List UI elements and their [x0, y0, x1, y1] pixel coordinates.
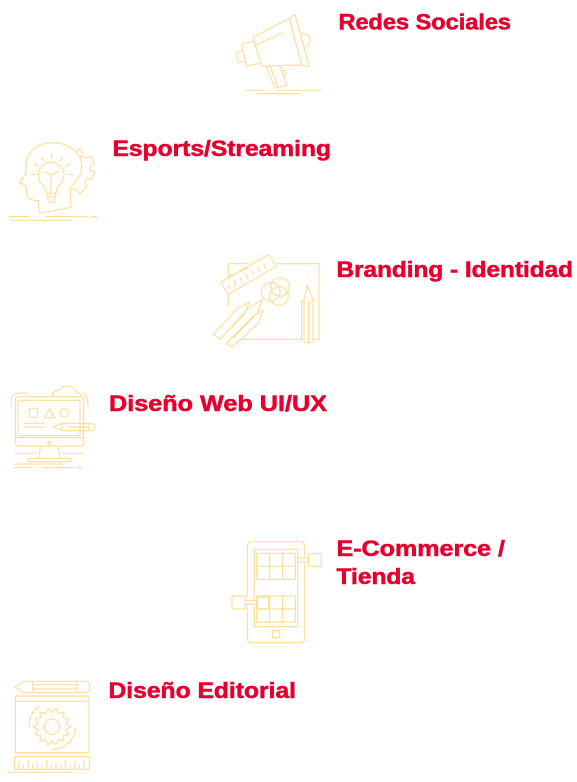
icon: computer monitor with pencil — [11, 386, 95, 468]
icon: smartphone with e-commerce grid — [232, 542, 321, 643]
heading: Branding - Identidad: Branding - Identidad — [336, 257, 573, 282]
heading: Redes Sociales: Redes Sociales — [338, 10, 511, 34]
heading: Diseño Editorial: Diseño Editorial — [108, 678, 296, 703]
heading: Esports/Streaming: Esports/Streaming — [112, 136, 331, 161]
heading: E-Commerce / Tienda: Tienda — [336, 564, 416, 589]
icon: megaphone — [236, 15, 321, 94]
heading: Diseño Web UI/UX: Diseño Web UI/UX — [109, 391, 327, 416]
icon: ruler, pencils and paper — [213, 254, 319, 347]
icon: head with lightbulb and gear — [9, 143, 97, 220]
heading: E-Commerce / Tienda: E-Commerce / — [336, 536, 506, 561]
icon: pencil, gear and ruler — [7, 681, 90, 772]
heading: E-Commerce / Tienda — [336, 536, 506, 589]
